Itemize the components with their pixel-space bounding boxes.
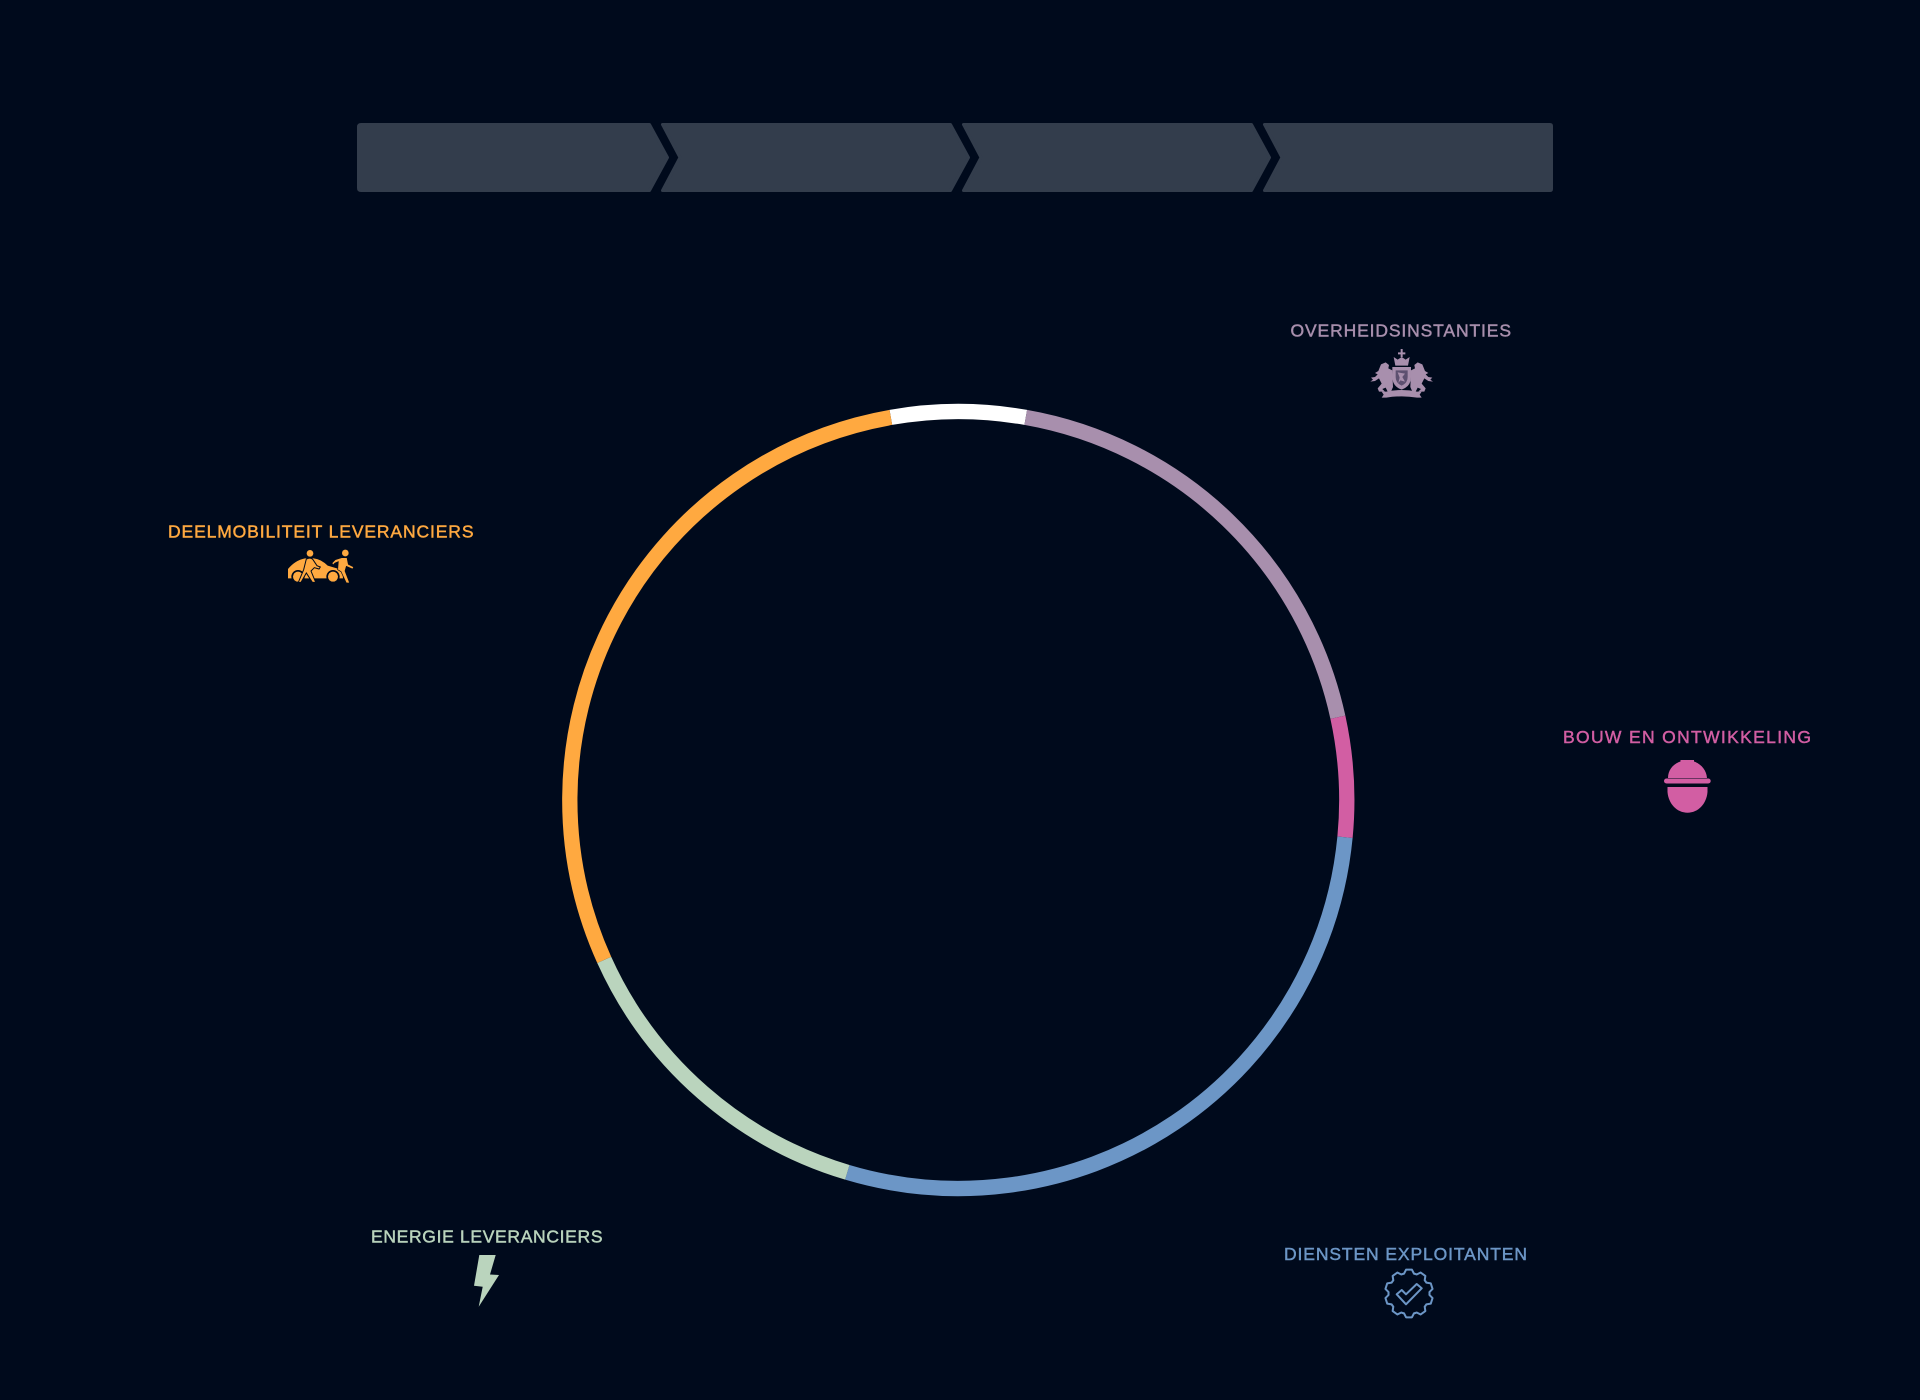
ring segment: deelmobiliteit leveranciers xyxy=(570,417,891,960)
label: overheidsinstanties: OVERHEIDSINSTANTIES xyxy=(1290,320,1511,340)
icon: lightning bolt xyxy=(474,1255,499,1307)
chevron step 1 xyxy=(358,124,668,190)
icon: gear with check xyxy=(1384,1270,1434,1317)
label: bouw en ontwikkeling: BOUW EN ONTWIKKELING xyxy=(1563,727,1811,747)
chevron step 4 xyxy=(1264,124,1552,190)
ring segment: bouw en ontwikkeling xyxy=(1338,717,1347,837)
icon: people and car xyxy=(288,550,354,583)
ring segment: diensten exploitanten xyxy=(847,837,1345,1188)
icon: hard hat xyxy=(1664,760,1711,813)
ring chart xyxy=(570,411,1347,1188)
label: deelmobiliteit leveranciers: DEELMOBILITEIT LEVERANCIERS xyxy=(168,522,474,542)
chevron step 2 xyxy=(662,124,968,190)
label: energie leveranciers: ENERGIE LEVERANCIERS xyxy=(371,1226,602,1246)
chevron step 3 xyxy=(964,124,1270,190)
ring segment: energie leveranciers xyxy=(604,960,847,1172)
label: diensten exploitanten: DIENSTEN EXPLOITANTEN xyxy=(1284,1244,1527,1264)
icon: coat of arms xyxy=(1370,349,1433,398)
process chevron bar xyxy=(358,124,1552,190)
ring segment: overheidsinstanties xyxy=(1026,417,1338,717)
ring segment: white xyxy=(891,411,1026,417)
